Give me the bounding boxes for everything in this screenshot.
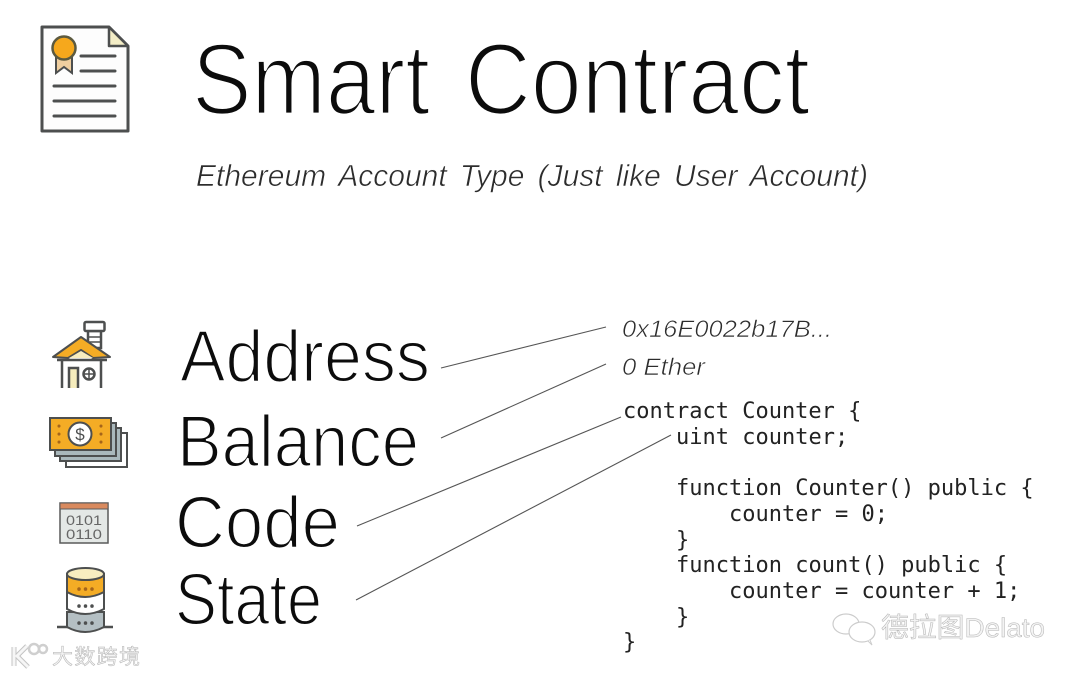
watermark: big data cross-border: 大数跨境 [52, 646, 140, 669]
heading: State: State [175, 560, 322, 640]
icon: contract document [42, 27, 128, 131]
code block [623, 399, 1034, 655]
code block: counter = counter + 1; [729, 579, 1020, 604]
code block: counter = 0; [729, 502, 888, 527]
code block: function count() public { [676, 553, 1007, 578]
heading: Balance: Balance [177, 402, 419, 482]
code block: } [676, 528, 689, 553]
code block: uint counter; [676, 425, 848, 450]
heading: Address: Address [180, 316, 430, 398]
address value: 0x16E0022b17B... [622, 316, 832, 343]
code block: } [623, 630, 636, 655]
icon: code window: 0101 [66, 512, 102, 528]
watermark: big data cross-border [14, 644, 140, 669]
connector: State to source [356, 435, 671, 600]
icon: house [53, 322, 110, 388]
icon: database [57, 568, 113, 632]
title: Smart [192, 24, 430, 136]
title [192, 24, 810, 136]
code block: } [676, 605, 689, 630]
connector: Address to value [441, 327, 606, 368]
icon: code window: 0110 [66, 526, 102, 542]
subtitle: Ethereum Account Type (Just like User Account) [196, 158, 868, 193]
watermark: Delato account: 德拉图Delato [881, 613, 1045, 643]
icon: banknotes [50, 418, 127, 467]
balance value: 0 Ether [622, 354, 706, 381]
connector: Code to source [357, 417, 621, 526]
icon: code window [60, 503, 108, 543]
heading: Code: Code [175, 482, 340, 564]
icon: banknotes: $ [75, 425, 85, 444]
connector: Balance to value [441, 364, 606, 438]
code block: function Counter() public { [676, 476, 1034, 501]
title: Contract [465, 24, 810, 136]
code block: contract Counter { [623, 399, 861, 424]
